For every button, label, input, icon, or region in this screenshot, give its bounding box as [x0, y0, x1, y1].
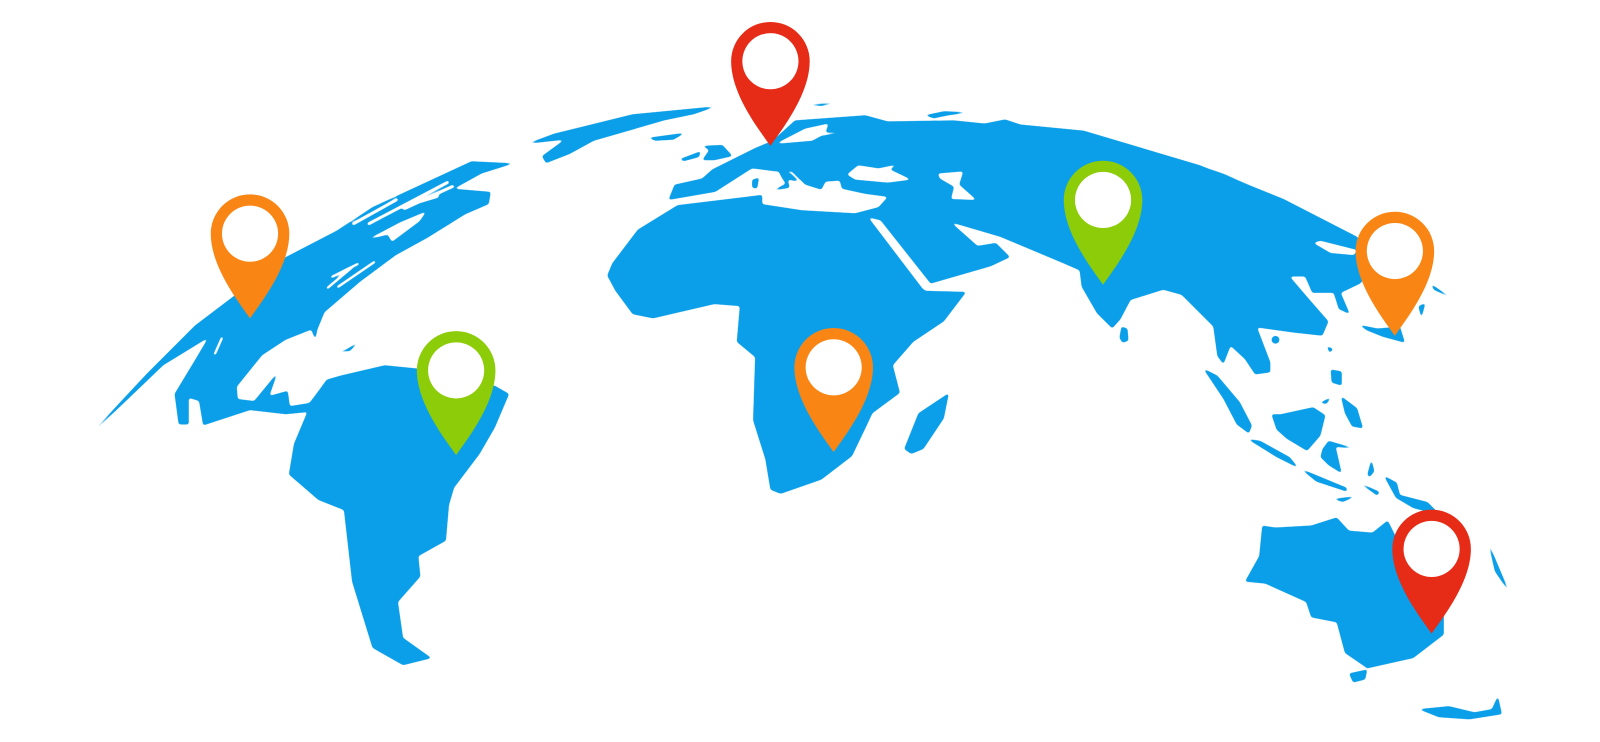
Tasmania — [1349, 669, 1367, 683]
New Guinea — [1384, 475, 1441, 515]
pin: North America orange — [211, 194, 289, 318]
Greenland — [527, 106, 717, 163]
pin: Africa orange — [794, 328, 873, 452]
Caspian Sea — [938, 171, 977, 200]
Sea of Okhotsk — [1313, 241, 1357, 255]
pin: Asia green — [1064, 161, 1142, 285]
Arctic islands — [802, 102, 1257, 186]
Italy, Sardinia and Sicily — [752, 169, 799, 191]
pin: South America green — [417, 331, 495, 455]
Red Sea — [868, 217, 931, 290]
pin: Europe red — [731, 22, 810, 146]
Mediterranean Sea — [715, 168, 888, 213]
pin: Australia red — [1392, 510, 1471, 634]
pin: East Asia orange — [1356, 212, 1434, 336]
Japan and Kamchatka — [1358, 284, 1455, 343]
New Zealand — [1418, 696, 1502, 719]
Madagascar — [904, 393, 949, 454]
Southeast Asia islands — [1203, 336, 1380, 502]
Black Sea — [847, 164, 911, 183]
world map land masses — [90, 102, 1510, 719]
North America — [90, 161, 514, 435]
Sri Lanka — [1119, 327, 1129, 343]
Pacific islands — [1488, 541, 1510, 594]
South America — [289, 365, 509, 665]
Australia — [1245, 517, 1444, 668]
Baltic Sea — [776, 123, 848, 144]
Eurasia and Africa — [607, 115, 1372, 494]
Iceland and British Isles — [648, 133, 733, 161]
